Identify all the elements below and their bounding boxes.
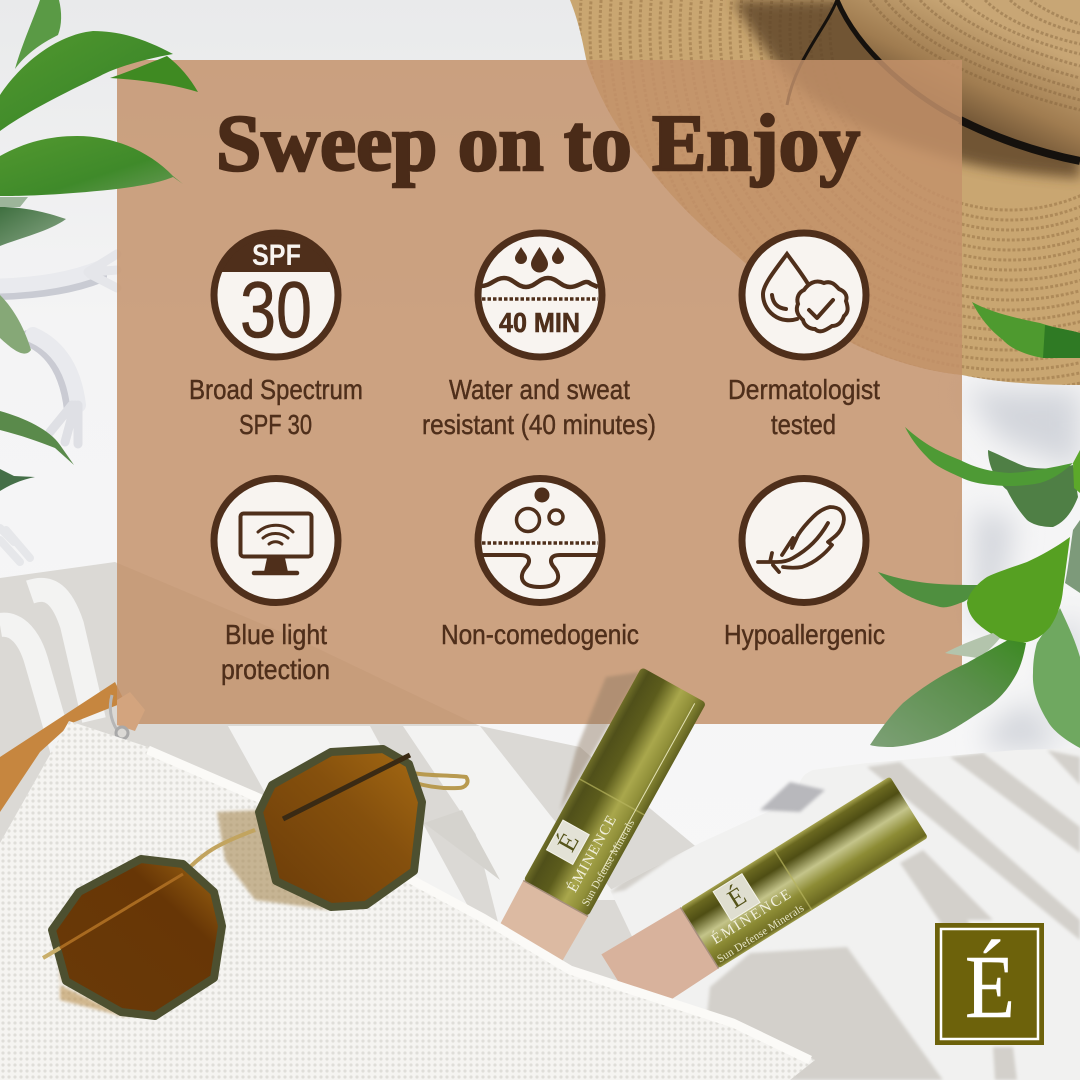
towel right bbox=[600, 740, 1080, 1080]
leaves left bbox=[0, 0, 198, 491]
icon: blue light protection bbox=[214, 478, 338, 602]
product label: É mark: É bbox=[722, 881, 751, 914]
towel left bbox=[0, 562, 695, 981]
product: tube two: ÉMINENCE bbox=[709, 886, 794, 948]
leaves right bbox=[870, 302, 1080, 748]
label: Blue light protection: Blue light bbox=[225, 619, 327, 650]
label: Broad Spectrum SPF 30: SPF 30 bbox=[239, 409, 312, 440]
pouch strap bbox=[0, 682, 125, 812]
icon: water resistant 40 min: 40 MIN bbox=[499, 307, 580, 338]
pouch tab and ring bbox=[110, 692, 145, 739]
product label: É mark: É bbox=[552, 829, 585, 856]
label: Non-comedogenic: Non-comedogenic bbox=[441, 619, 639, 650]
logo: É bbox=[965, 938, 1015, 1037]
icon: water resistant 40 min bbox=[478, 233, 602, 357]
label: Dermatologist tested: tested bbox=[771, 409, 836, 440]
label: Dermatologist tested bbox=[728, 374, 880, 440]
rope bbox=[0, 254, 117, 562]
product: tube two: Sun Defense Minerals bbox=[715, 902, 806, 965]
label: Broad Spectrum SPF 30 bbox=[189, 374, 363, 440]
icon: SPF 30 bbox=[205, 225, 347, 357]
label: Dermatologist tested: Dermatologist bbox=[728, 374, 880, 405]
panel bbox=[117, 60, 962, 724]
label: Broad Spectrum SPF 30: Broad Spectrum bbox=[189, 374, 363, 405]
label: Water and sweat resistant bbox=[422, 374, 656, 440]
icon: SPF 30: SPF bbox=[252, 239, 301, 272]
logo bbox=[935, 923, 1044, 1045]
label: Water and sweat resistant: resistant (40 minutes) bbox=[422, 409, 656, 440]
product label: É mark bbox=[713, 874, 760, 921]
sunglasses bbox=[43, 749, 468, 1018]
white pouch bbox=[0, 721, 815, 1080]
shadows behind products bbox=[760, 782, 825, 812]
icon: SPF 30: 30 bbox=[240, 265, 312, 354]
product: tube two bbox=[601, 775, 929, 1019]
label: Blue light protection bbox=[221, 619, 330, 685]
product: tube one: ÉMINENCE bbox=[564, 813, 620, 895]
icon: dermatologist tested bbox=[742, 233, 866, 357]
label: Water and sweat resistant: Water and sweat bbox=[449, 374, 630, 405]
straw hat bbox=[570, 0, 1080, 385]
icon: hypoallergenic feather bbox=[742, 478, 866, 602]
leaf shadows on the surface bbox=[965, 390, 1080, 750]
label: Blue light protection: protection bbox=[221, 654, 330, 685]
icon: non-comedogenic bbox=[478, 478, 602, 602]
product: tube one bbox=[496, 667, 706, 965]
product label: É mark bbox=[546, 820, 589, 864]
label: Hypoallergenic: Hypoallergenic bbox=[724, 619, 885, 650]
title: Sweep on to Enjoy bbox=[216, 100, 860, 188]
tube shadow on panel bbox=[560, 672, 640, 810]
product: tube one: Sun Defense Minerals bbox=[580, 818, 637, 908]
